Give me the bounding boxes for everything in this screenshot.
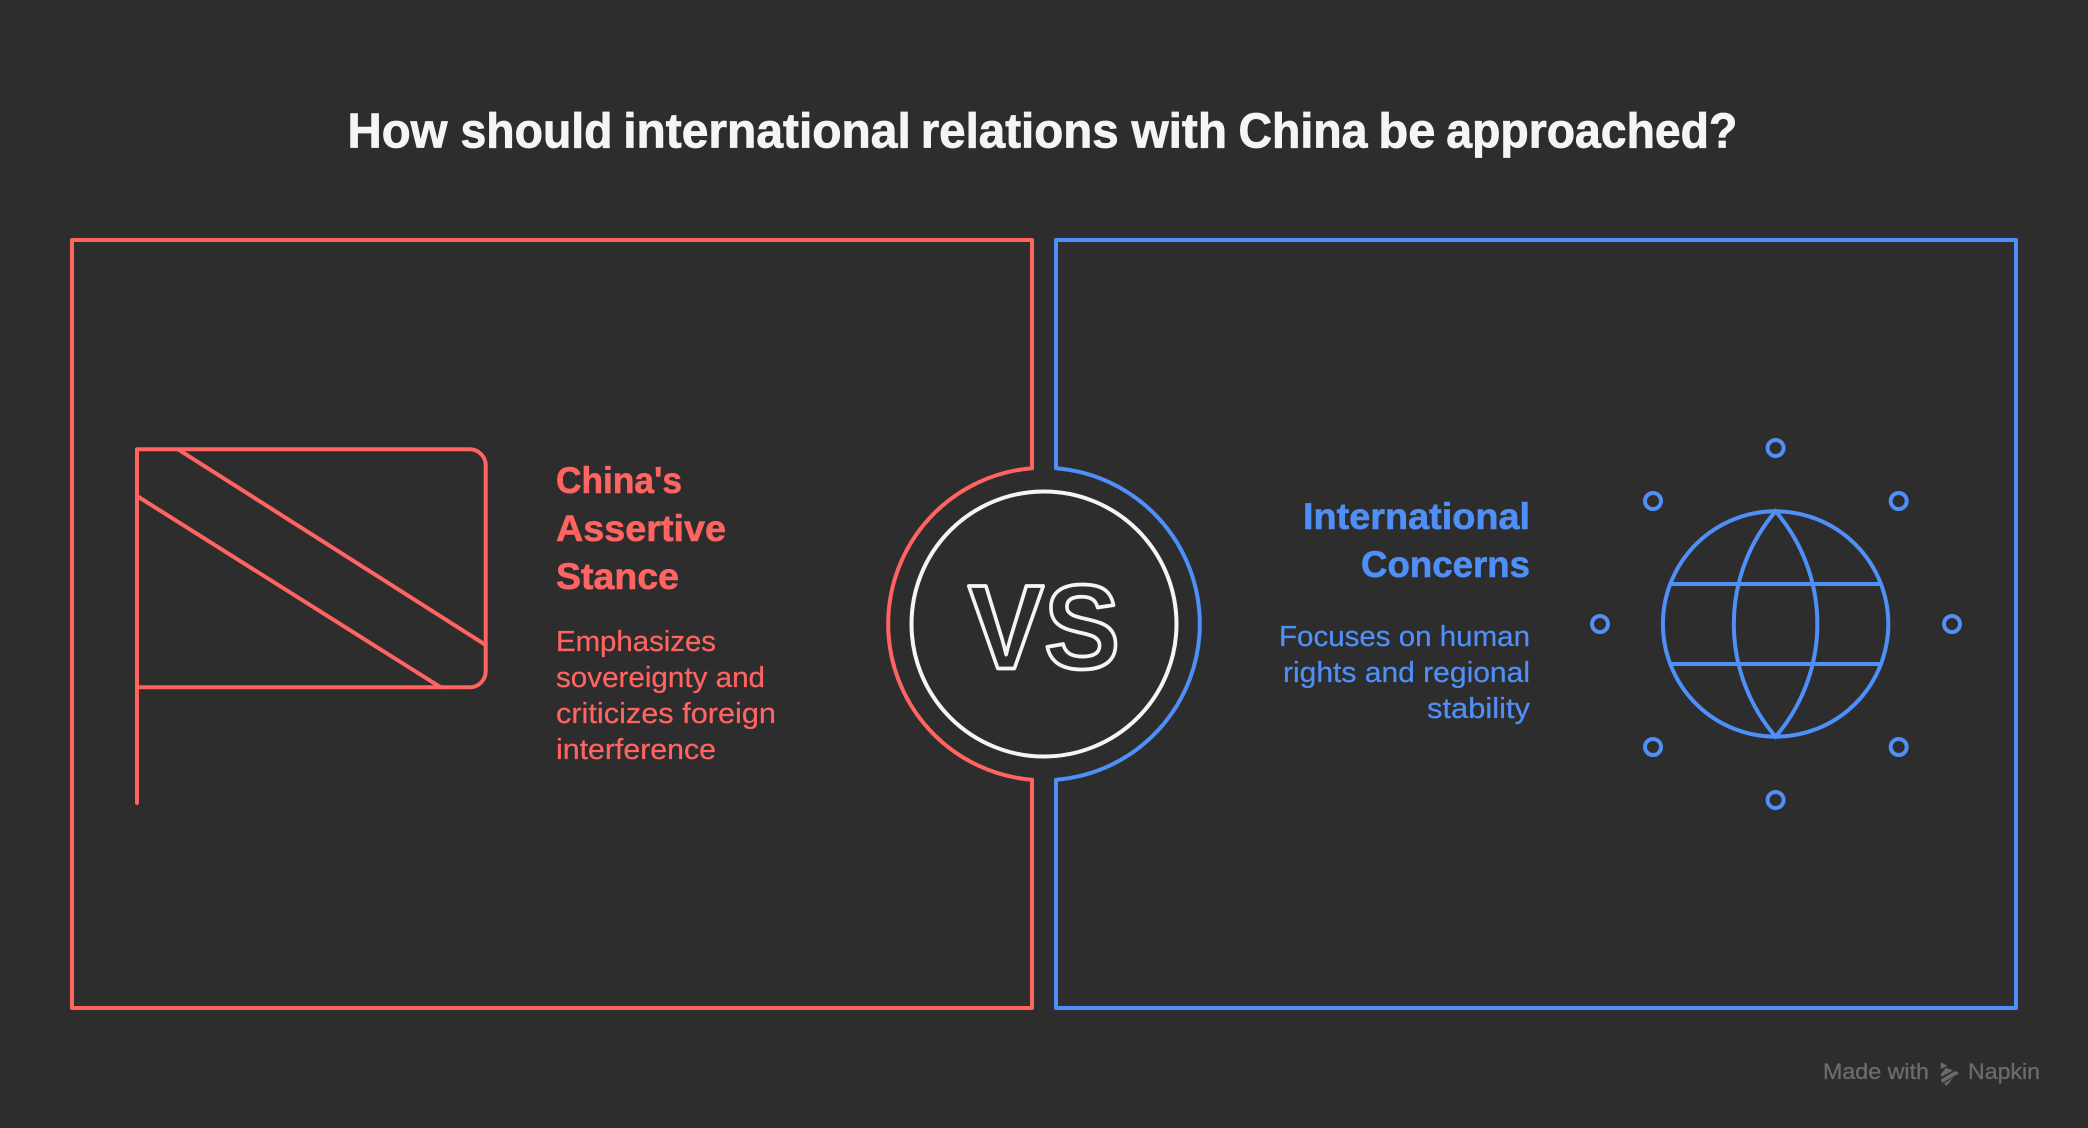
text: China description: Emphasizes [556, 626, 716, 658]
badge ring [912, 492, 1176, 756]
title: relations [921, 104, 1119, 158]
footer: Made with Napkin: Napkin [1968, 1059, 2040, 1084]
text: China description: sovereignty and [556, 662, 765, 694]
text: international description: stability [1427, 693, 1531, 725]
title: approached? [1446, 104, 1737, 158]
panel: international concerns [1056, 240, 2016, 1008]
heading: International Concerns: International [1303, 496, 1530, 537]
heading: China's Assertive Stance: Stance [556, 556, 679, 597]
panel: China's assertive stance [72, 240, 1032, 1008]
text: international description: rights and regional [1283, 657, 1530, 689]
footer: Made with Napkin [1823, 1059, 2040, 1086]
text: China description [556, 626, 776, 766]
icon: flag [137, 449, 486, 803]
text: China description: interference [556, 734, 716, 766]
VS badge [912, 492, 1176, 756]
title: be [1378, 104, 1435, 158]
footer: Made with Napkin: Made with [1823, 1059, 1929, 1084]
heading: International Concerns [1303, 496, 1530, 585]
title: should [460, 104, 612, 158]
text: international description: Focuses on human [1279, 621, 1530, 653]
panel outline: blue [1056, 240, 2016, 1008]
title: international [623, 104, 911, 158]
title: How [348, 104, 448, 158]
icon: Napkin logo [1941, 1062, 1959, 1086]
heading: China's Assertive Stance: China's [556, 460, 682, 501]
heading: China's Assertive Stance: Assertive [556, 508, 726, 549]
heading: China's Assertive Stance [556, 460, 726, 597]
text: international description [1279, 621, 1531, 725]
VS outlined text: VS [968, 560, 1120, 694]
icon: globe with surrounding dots [1592, 440, 1960, 808]
panel outline: red [72, 240, 1032, 1008]
title: China [1238, 104, 1368, 158]
heading: International Concerns: Concerns [1361, 544, 1530, 585]
text: China description: criticizes foreign [556, 698, 776, 730]
title: with [1131, 104, 1227, 158]
